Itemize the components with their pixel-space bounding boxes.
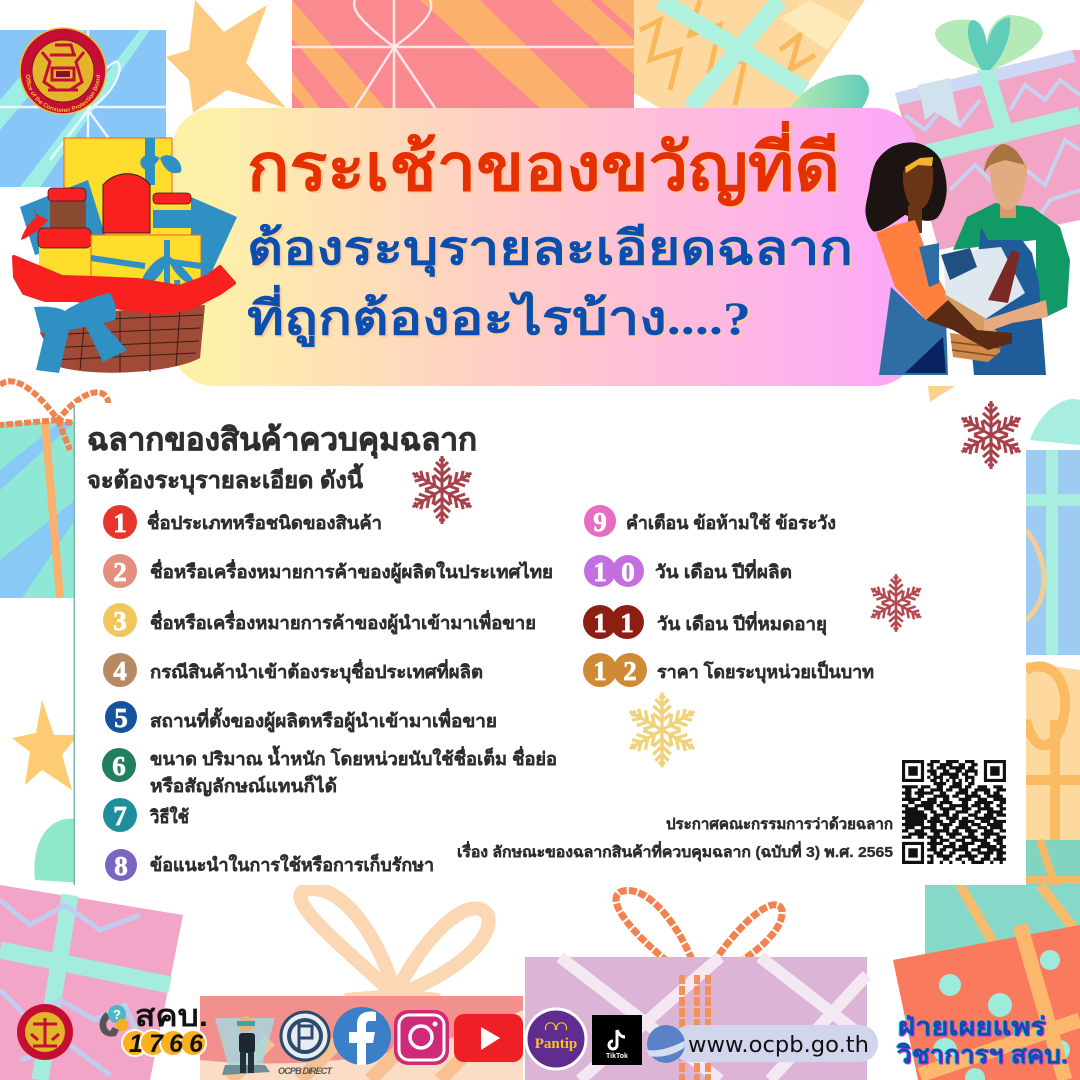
snowflake: gold	[625, 693, 699, 767]
item 4: กรณีสินค้านำเข้าต้องระบุชื่อประเทศที่ผลิต	[150, 659, 483, 684]
bow: mint top right	[935, 15, 1043, 70]
item 10: 1	[593, 557, 607, 587]
footer: OCPB logo: OCPB DIRECT	[278, 1066, 334, 1076]
title	[247, 120, 853, 348]
item 8	[105, 849, 434, 881]
item 3: 3	[113, 606, 127, 636]
item 6: หรือสัญลักษณ์แทนก็ได้	[150, 774, 337, 797]
item 11: 1	[620, 608, 634, 638]
ribbon: orange striped left	[0, 381, 108, 450]
footer: department name	[896, 1013, 1068, 1069]
item 6: ขนาด ปริมาณ น้ำหนัก โดยหน่วยนับใช้ชื่อเต็ม ชื่อย่อ	[150, 745, 557, 769]
item 6	[102, 745, 557, 797]
item 8: 8	[114, 851, 128, 881]
item 9: คำเตือน ข้อห้ามใช้ ข้อระวัง	[626, 512, 836, 533]
title line 1: กระเช้าของขวัญที่ดี	[247, 120, 840, 206]
gift: purple bottom	[525, 957, 867, 1080]
item 7: วิธีใช้	[149, 806, 189, 827]
bow: right top above blue gift	[1030, 399, 1080, 445]
item 4	[103, 653, 483, 687]
footer: OCPB logo	[278, 1012, 334, 1076]
item 1: ชื่อประเภทหรือชนิดของสินค้า	[147, 510, 382, 533]
footer: YouTube	[454, 1014, 523, 1062]
icon: consumer protection seal top: Office of the Consumer Protection Board	[26, 74, 100, 112]
title line 3: ที่ถูกต้องอะไรบ้าง....?	[247, 284, 751, 348]
item 1: 1	[113, 508, 127, 538]
source note	[457, 816, 893, 862]
footer: Facebook	[333, 1007, 391, 1065]
item 3: ชื่อหรือเครื่องหมายการค้าของผู้นำเข้ามาเพื่อขาย	[150, 610, 536, 635]
item 9	[584, 505, 836, 537]
gift: left teal with ribbon	[0, 422, 75, 598]
footer: TikTok: TikTok	[606, 1053, 628, 1060]
item 6: 6	[112, 751, 126, 781]
footer: department name: ฝ่ายเผยแพร่	[898, 1013, 1047, 1041]
footer: Pantip	[526, 1009, 586, 1069]
gift: pink top right	[895, 50, 1080, 250]
item 9: 9	[593, 507, 607, 537]
footer: hotline 1766	[100, 1000, 208, 1058]
ribbon: orange bow bottom	[616, 890, 782, 1000]
footer: OCPB Direct mascot	[215, 1016, 275, 1075]
item 1	[103, 505, 382, 539]
footer: hotline 1766: 1766	[129, 1030, 204, 1058]
footer: website pill: www.ocpb.go.th	[688, 1033, 869, 1058]
item 5	[105, 701, 497, 733]
item 11: 1	[593, 608, 607, 638]
snowflake: middle right	[868, 574, 924, 632]
item 5: สถานที่ตั้งของผู้ผลิตหรือผู้นำเข้ามาเพื่อขาย	[150, 707, 497, 733]
icon: two people holding basket	[867, 144, 1070, 375]
item 2: 2	[113, 557, 127, 587]
item 2	[103, 554, 553, 588]
snowflake: top right	[958, 401, 1024, 469]
star: behind people	[928, 386, 955, 402]
sub-heading: จะต้องระบุรายละเอียด ดังนี้	[87, 463, 364, 495]
star: left middle	[12, 700, 78, 790]
QR code	[902, 760, 1006, 864]
footer: Pantip: Pantip	[535, 1036, 577, 1052]
gift: yellow top	[634, 0, 865, 108]
footer: website pill	[647, 1025, 878, 1063]
gift: red top	[292, 0, 634, 108]
item 4: 4	[113, 656, 127, 686]
item 7: 7	[113, 801, 127, 831]
footer: consumer protection seal	[17, 1004, 73, 1060]
panel: label requirements	[74, 401, 1026, 885]
footer: hotline 1766: ?	[113, 1007, 121, 1022]
gift: right blue	[1026, 450, 1080, 655]
bow: mint bottom left	[34, 819, 122, 885]
item 12: 2	[623, 656, 637, 686]
footer: TikTok	[592, 1015, 642, 1065]
item 12: 1	[593, 656, 607, 686]
item 12	[583, 653, 874, 687]
gift: right orange	[1026, 662, 1080, 900]
title line 2: ต้องระบุรายละเอียดฉลาก	[247, 223, 853, 277]
source note: ประกาศคณะกรรมการว่าด้วยฉลาก	[666, 816, 893, 833]
item 12: ราคา โดยระบุหน่วยเป็นบาท	[657, 660, 874, 684]
item 2: ชื่อหรือเครื่องหมายการค้าของผู้ผลิตในประเทศไทย	[150, 559, 553, 584]
bow: mint behind yellow gift	[790, 75, 869, 108]
footer: Instagram	[394, 1010, 449, 1065]
icon: consumer protection seal top	[19, 27, 107, 115]
item 7	[103, 798, 189, 832]
gift: blue top left	[0, 30, 166, 187]
item 10: 0	[621, 557, 635, 587]
gift: salmon bottom strip	[200, 996, 523, 1080]
gift: coral bottom right	[893, 885, 1080, 1080]
item 3	[103, 603, 536, 637]
item 11	[583, 605, 827, 639]
item 8: ข้อแนะนำในการใช้หรือการเก็บรักษา	[150, 853, 434, 875]
ribbon: peach bow bottom centre	[300, 889, 489, 1000]
star: top orange	[166, 0, 286, 113]
source note: เรื่อง ลักษณะของฉลากสินค้าที่ควบคุมฉลาก (ฉบับที่ 3) พ.ศ. 2565	[457, 841, 893, 862]
footer: department name: วิชาการฯ สคบ.	[896, 1041, 1068, 1069]
heading: ฉลากของสินค้าควบคุมฉลาก	[87, 422, 477, 459]
item 11: วัน เดือน ปีที่หมดอายุ	[657, 611, 827, 636]
item 10: วัน เดือน ปีที่ผลิต	[655, 559, 792, 582]
item 5: 5	[114, 703, 128, 733]
gift: pink bottom left	[0, 885, 183, 1080]
footer: hotline 1766: สคบ.	[135, 1000, 208, 1033]
item 10	[584, 555, 792, 587]
snowflake: dark red near heading	[409, 456, 475, 524]
banner	[172, 108, 917, 386]
icon: gift basket	[14, 138, 237, 373]
